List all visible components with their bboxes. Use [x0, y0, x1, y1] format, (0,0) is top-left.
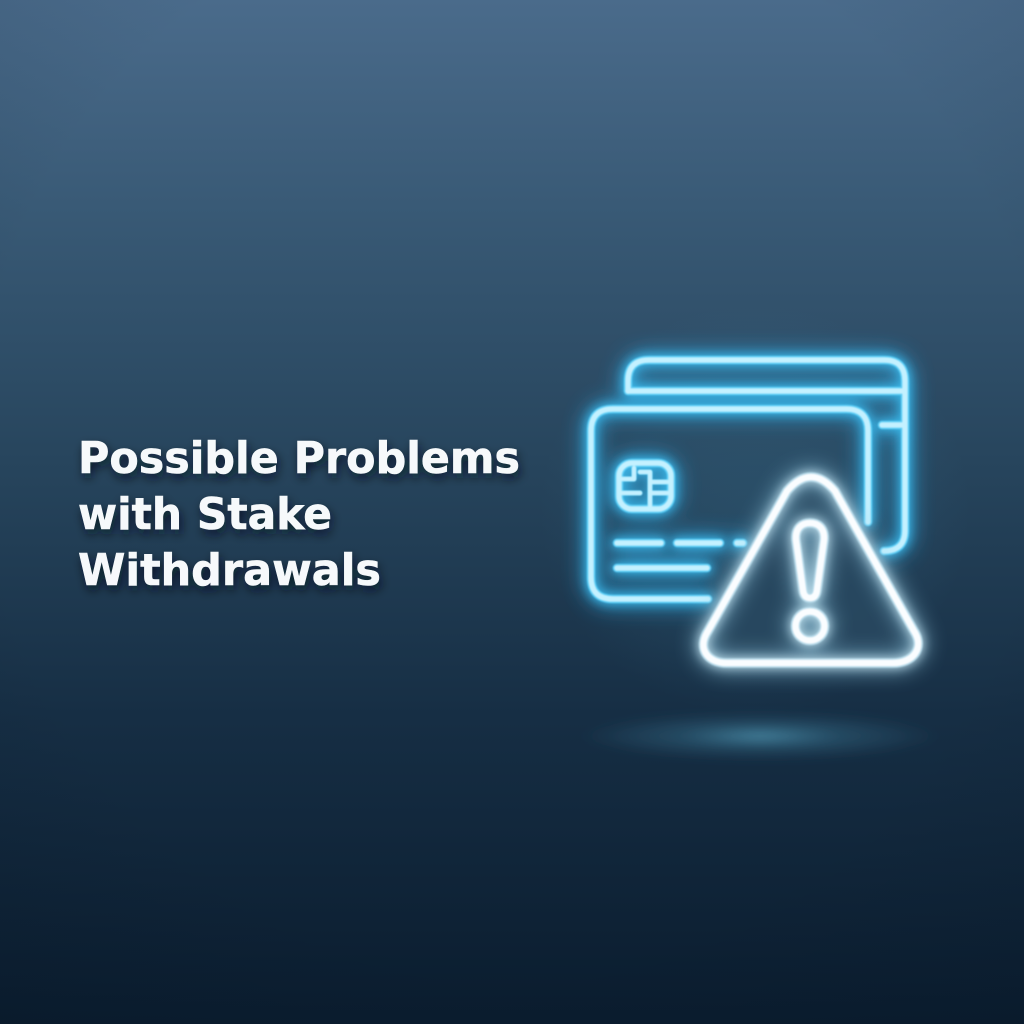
icon: credit cards	[591, 360, 905, 599]
title	[78, 433, 522, 601]
title: with Stake	[80, 494, 334, 545]
light pool under icon	[580, 712, 940, 760]
title: Possible Problems	[80, 438, 522, 489]
title: Withdrawals	[78, 545, 381, 596]
icon: warning triangle	[703, 477, 918, 663]
title: Withdrawals	[80, 550, 383, 601]
title: Possible Problems	[78, 433, 520, 484]
icon: neon credit cards with warning triangle	[540, 305, 970, 715]
title: with Stake	[78, 489, 332, 540]
ambient icon glow	[540, 305, 970, 715]
